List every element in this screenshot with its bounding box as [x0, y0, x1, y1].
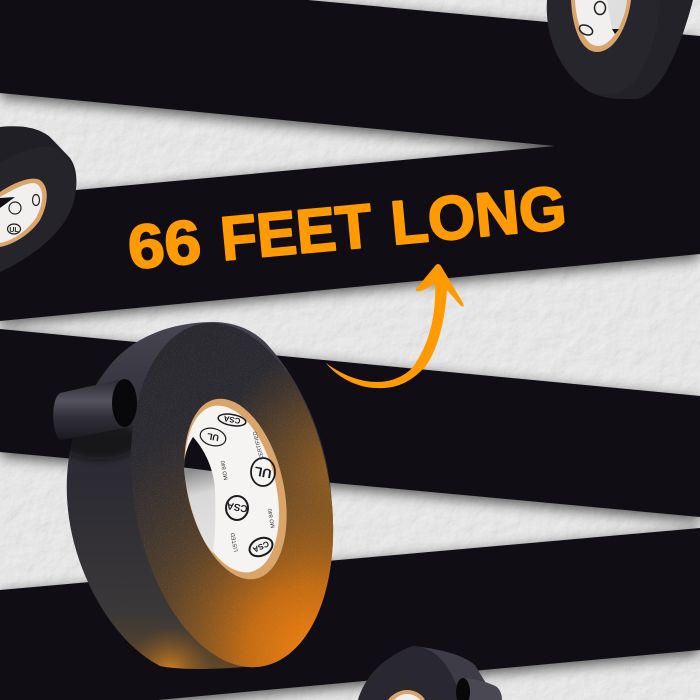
core label with logos: MO 840	[220, 460, 230, 480]
arrow	[326, 264, 464, 388]
core label with logos: UL	[253, 464, 273, 481]
cardboard core	[168, 389, 303, 589]
tape roll: top right	[547, 0, 693, 99]
core label with logos: CSA	[226, 499, 249, 514]
title: FEET	[218, 192, 375, 274]
core label with logos: CSA	[251, 539, 270, 554]
tape side surface	[66, 322, 332, 669]
core label with logos: CERTIFIED	[252, 430, 266, 460]
title: LONG	[388, 174, 569, 259]
title: 66	[125, 207, 204, 283]
black tape strip: middle	[0, 329, 700, 517]
tape roll: bottom	[358, 646, 502, 700]
black tape strip: lower	[0, 528, 700, 700]
core label with logos: CSA	[223, 414, 241, 425]
tape front face	[131, 322, 334, 668]
core label with logos: MO 840	[267, 508, 277, 528]
tape roll: top left	[0, 126, 76, 272]
tape roll: main	[53, 322, 334, 669]
black tape strip: upper	[0, 0, 700, 321]
core label with logos: LISTED	[230, 532, 240, 552]
core label with logos: UL	[206, 431, 220, 443]
tape roll: top left: UL	[9, 227, 19, 234]
core label with logos	[170, 396, 294, 582]
view through core	[184, 437, 216, 553]
tape flap	[53, 379, 137, 440]
